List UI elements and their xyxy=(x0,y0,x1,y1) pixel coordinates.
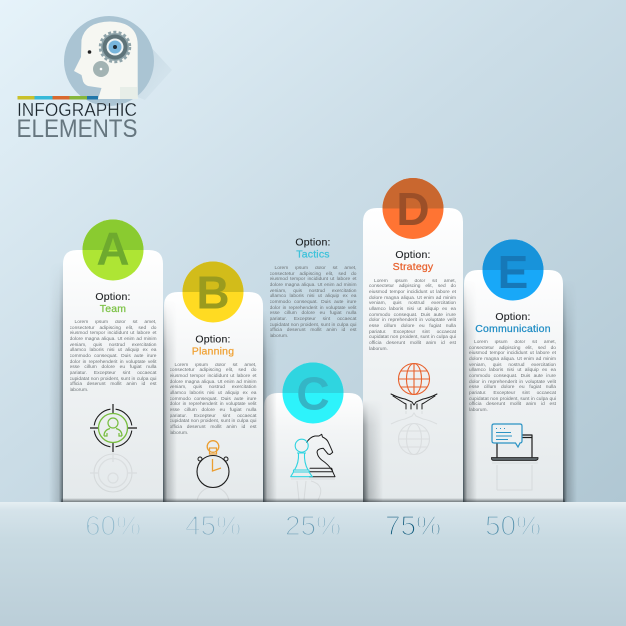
text block C xyxy=(270,266,356,341)
icon reflection: target xyxy=(90,452,137,492)
heading C: Tactics xyxy=(296,248,330,260)
text block B: cupidatat non proident, sunt in culpa qui xyxy=(170,419,256,424)
icon: laptop with chat bubble xyxy=(492,424,538,460)
circle badge B: B xyxy=(196,266,230,318)
text block D: officia deserunt mollit anim id est xyxy=(369,341,456,346)
text block E: laborum. xyxy=(469,408,488,413)
heading E: Option: xyxy=(495,311,531,323)
text block D: eiusmod tempor incididunt ut labore et xyxy=(369,290,456,295)
floor xyxy=(0,502,626,626)
heading D: Option: xyxy=(395,249,431,261)
heading A: Option: xyxy=(95,291,131,303)
eye dot xyxy=(88,50,91,54)
icon reflection: chess xyxy=(291,479,335,500)
text block C: cupidatat non proident, sunt in culpa qui xyxy=(270,323,356,328)
circle badge D xyxy=(382,178,444,239)
text block D: consectetur adipiscing elit, sed do xyxy=(369,284,456,289)
logo: INFOGRAPHIC: INFOGRAPHIC xyxy=(17,100,137,120)
text block E: Lorem ipsum dolor sit amet, xyxy=(474,340,556,345)
text block C: esse cillum dolore eu fugiat nulla xyxy=(270,311,356,316)
circle badge C: C xyxy=(296,368,330,420)
heading A xyxy=(95,291,131,315)
heading E xyxy=(475,311,551,335)
text block D: ullamco laboris nisi ut aliquip ex ea xyxy=(369,307,456,312)
icon background circle xyxy=(64,16,154,106)
card edge shadows xyxy=(49,262,577,502)
text block A: commodo consequat. Duis aute irure xyxy=(70,354,156,359)
text block A: ullamco laboris nisi ut aliquip ex ea xyxy=(70,348,156,353)
long shadow xyxy=(120,30,172,100)
text block E: eiusmod tempor incididunt ut labore et xyxy=(469,351,556,356)
icon reflection: stopwatch xyxy=(197,486,229,500)
text block C: consectetur adipiscing elit, sed do xyxy=(270,272,356,277)
text block C: ullamco laboris nisi ut aliquip ex ea xyxy=(270,294,356,299)
heading B xyxy=(192,334,234,358)
text block A: laborum. xyxy=(70,388,88,393)
text block A: consectetur adipiscing elit, sed do xyxy=(70,326,156,331)
panel: card E xyxy=(464,270,563,502)
heading B: Option: xyxy=(195,334,231,346)
percent 50%: 50% xyxy=(485,510,541,541)
text block B: eiusmod tempor incididunt ut labore et xyxy=(170,374,256,379)
text block B: veniam, quis nostrud exercitation xyxy=(170,385,256,390)
text block A: dolore magna aliqua. Ut enim ad minim xyxy=(70,337,156,342)
heading B: Planning xyxy=(192,346,234,358)
text block B: esse cillum dolore eu fugiat nulla xyxy=(170,408,256,413)
text block E: dolor in reprehenderit in voluptate velit xyxy=(469,380,556,385)
icon: chess pieces xyxy=(291,434,335,477)
text block E: officia deserunt mollit anim id est xyxy=(469,402,556,407)
circle badge C xyxy=(282,362,344,424)
icon: target with person xyxy=(90,404,137,452)
circle badge E xyxy=(482,240,544,300)
heading C: Option: xyxy=(295,236,331,248)
text block C: laborum. xyxy=(270,334,288,339)
panel: card B xyxy=(164,292,263,502)
percent 25%: 25% xyxy=(285,510,341,541)
text block C: eiusmod tempor incididunt ut labore et xyxy=(270,277,356,282)
circle badge A xyxy=(82,220,144,280)
text block B: pariatur. Excepteur sint occaecat xyxy=(170,414,256,419)
logo: head icon in circle xyxy=(64,16,172,106)
text block A xyxy=(70,320,156,395)
heading E: Communication xyxy=(475,323,551,335)
text block A: eiusmod tempor incididunt ut labore et xyxy=(70,331,156,336)
panel: card D xyxy=(363,208,463,502)
text block A: cupidatat non proident, sunt in culpa qui xyxy=(70,377,156,382)
text block D: Lorem ipsum dolor sit amet, xyxy=(374,278,456,284)
text block D: cupidatat non proident, sunt in culpa qui xyxy=(369,335,456,340)
text block E: dolore magna aliqua. Ut enim ad minim xyxy=(469,357,556,362)
icon: globe in hands xyxy=(391,364,437,409)
circle badge A: A xyxy=(96,222,130,274)
circle badge E: E xyxy=(498,246,528,298)
text block E xyxy=(469,340,556,415)
circle badge B xyxy=(182,261,244,322)
icon reflection: globe xyxy=(391,411,437,454)
text block E: esse cillum dolore eu fugiat nulla xyxy=(469,385,556,390)
text block C: commodo consequat. Duis aute irure xyxy=(270,300,356,305)
text block A: veniam, quis nostrud exercitation xyxy=(70,343,156,348)
text block A: Lorem ipsum dolor sit amet, xyxy=(74,320,156,325)
text block D xyxy=(369,278,456,354)
heading A: Team xyxy=(100,303,126,315)
text block C: dolor in reprehenderit in voluptate velit xyxy=(270,306,356,311)
text block B: dolor in reprehenderit in voluptate velit xyxy=(170,402,256,407)
text block E: pariatur. Excepteur sint occaecat xyxy=(469,391,556,396)
icon reflection: laptop xyxy=(492,463,538,490)
text block D: pariatur. Excepteur sint occaecat xyxy=(369,330,456,335)
text block D: laborum. xyxy=(369,347,388,352)
circle badge D: D xyxy=(396,183,430,235)
text block C: pariatur. Excepteur sint occaecat xyxy=(270,317,356,322)
text block C: dolore magna aliqua. Ut enim ad minim xyxy=(270,283,356,288)
text block E: commodo consequat. Duis aute irure xyxy=(469,374,556,379)
percent 75%: 75% xyxy=(385,510,441,541)
logo: ELEMENTS: ELEMENTS xyxy=(16,115,138,143)
text block B: dolore magna aliqua. Ut enim ad minim xyxy=(170,380,256,385)
text block C: officia deserunt mollit anim id est xyxy=(270,328,356,333)
text block B: laborum. xyxy=(170,431,188,436)
text block D: dolore magna aliqua. Ut enim ad minim xyxy=(369,296,456,301)
text block B: consectetur adipiscing elit, sed do xyxy=(170,368,256,373)
icon: stopwatch xyxy=(197,441,229,488)
text block A: pariatur. Excepteur sint occaecat xyxy=(70,371,156,376)
head silhouette xyxy=(74,22,138,99)
text block D: esse cillum dolore eu fugiat nulla xyxy=(369,324,456,329)
text block B: commodo consequat. Duis aute irure xyxy=(170,397,256,402)
small gear xyxy=(93,61,109,77)
text block C: veniam, quis nostrud exercitation xyxy=(270,289,356,294)
text block D: veniam, quis nostrud exercitation xyxy=(369,301,456,306)
heading D: Strategy xyxy=(393,261,434,273)
panel: card A xyxy=(63,250,163,502)
text block D: dolor in reprehenderit in voluptate velit xyxy=(369,318,456,323)
head lower shade xyxy=(120,87,138,99)
text block B: Lorem ipsum dolor sit amet, xyxy=(174,363,256,368)
text block A: officia deserunt mollit anim id est xyxy=(70,382,156,387)
heading C xyxy=(295,236,331,260)
logo: colour bar xyxy=(18,96,98,100)
large gear xyxy=(100,32,130,62)
text block E: cupidatat non proident, sunt in culpa qui xyxy=(469,397,556,402)
text block B: officia deserunt mollit anim id est xyxy=(170,425,256,430)
text block C: Lorem ipsum dolor sit amet, xyxy=(274,266,356,271)
text block E: consectetur adipiscing elit, sed do xyxy=(469,346,556,351)
text block A: esse cillum dolore eu fugiat nulla xyxy=(70,365,156,370)
text block B xyxy=(170,363,256,438)
text block A: dolor in reprehenderit in voluptate velit xyxy=(70,360,156,365)
percent 45%: 45% xyxy=(185,510,241,541)
heading D xyxy=(393,249,434,273)
text block E: ullamco laboris nisi ut aliquip ex ea xyxy=(469,368,556,373)
panel: card C (behind) xyxy=(264,393,363,502)
text block B: ullamco laboris nisi ut aliquip ex ea xyxy=(170,391,256,396)
percent 60%: 60% xyxy=(85,510,141,541)
text block D: commodo consequat. Duis aute irure xyxy=(369,313,456,318)
text block E: veniam, quis nostrud exercitation xyxy=(469,363,556,368)
